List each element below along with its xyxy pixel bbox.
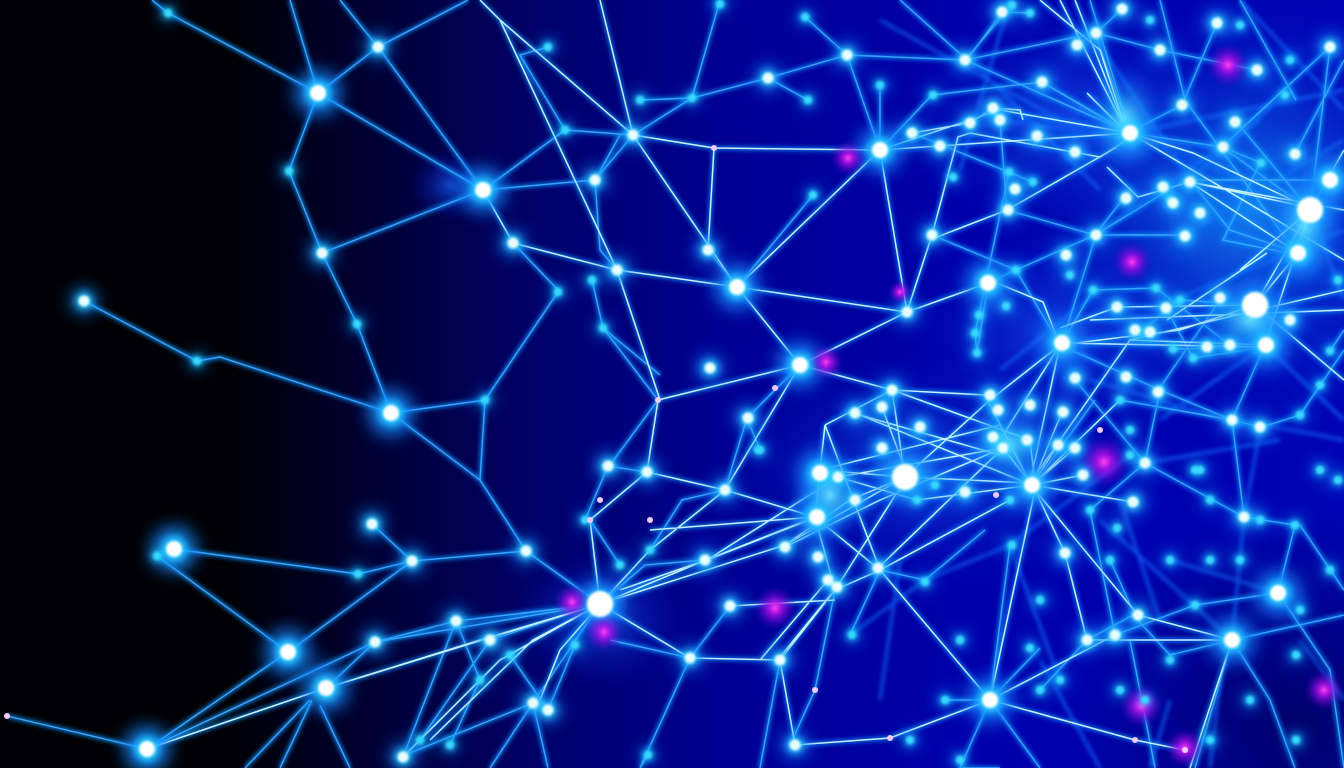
background haze (410, 0, 1344, 768)
brightest hub nodes (600, 210, 1310, 604)
purple glow spots (554, 43, 1344, 768)
cluster glows (570, 65, 1344, 632)
soft background lines (850, 0, 1344, 768)
pale and magenta accent nodes (7, 148, 1185, 750)
large white nodes (147, 93, 1330, 749)
